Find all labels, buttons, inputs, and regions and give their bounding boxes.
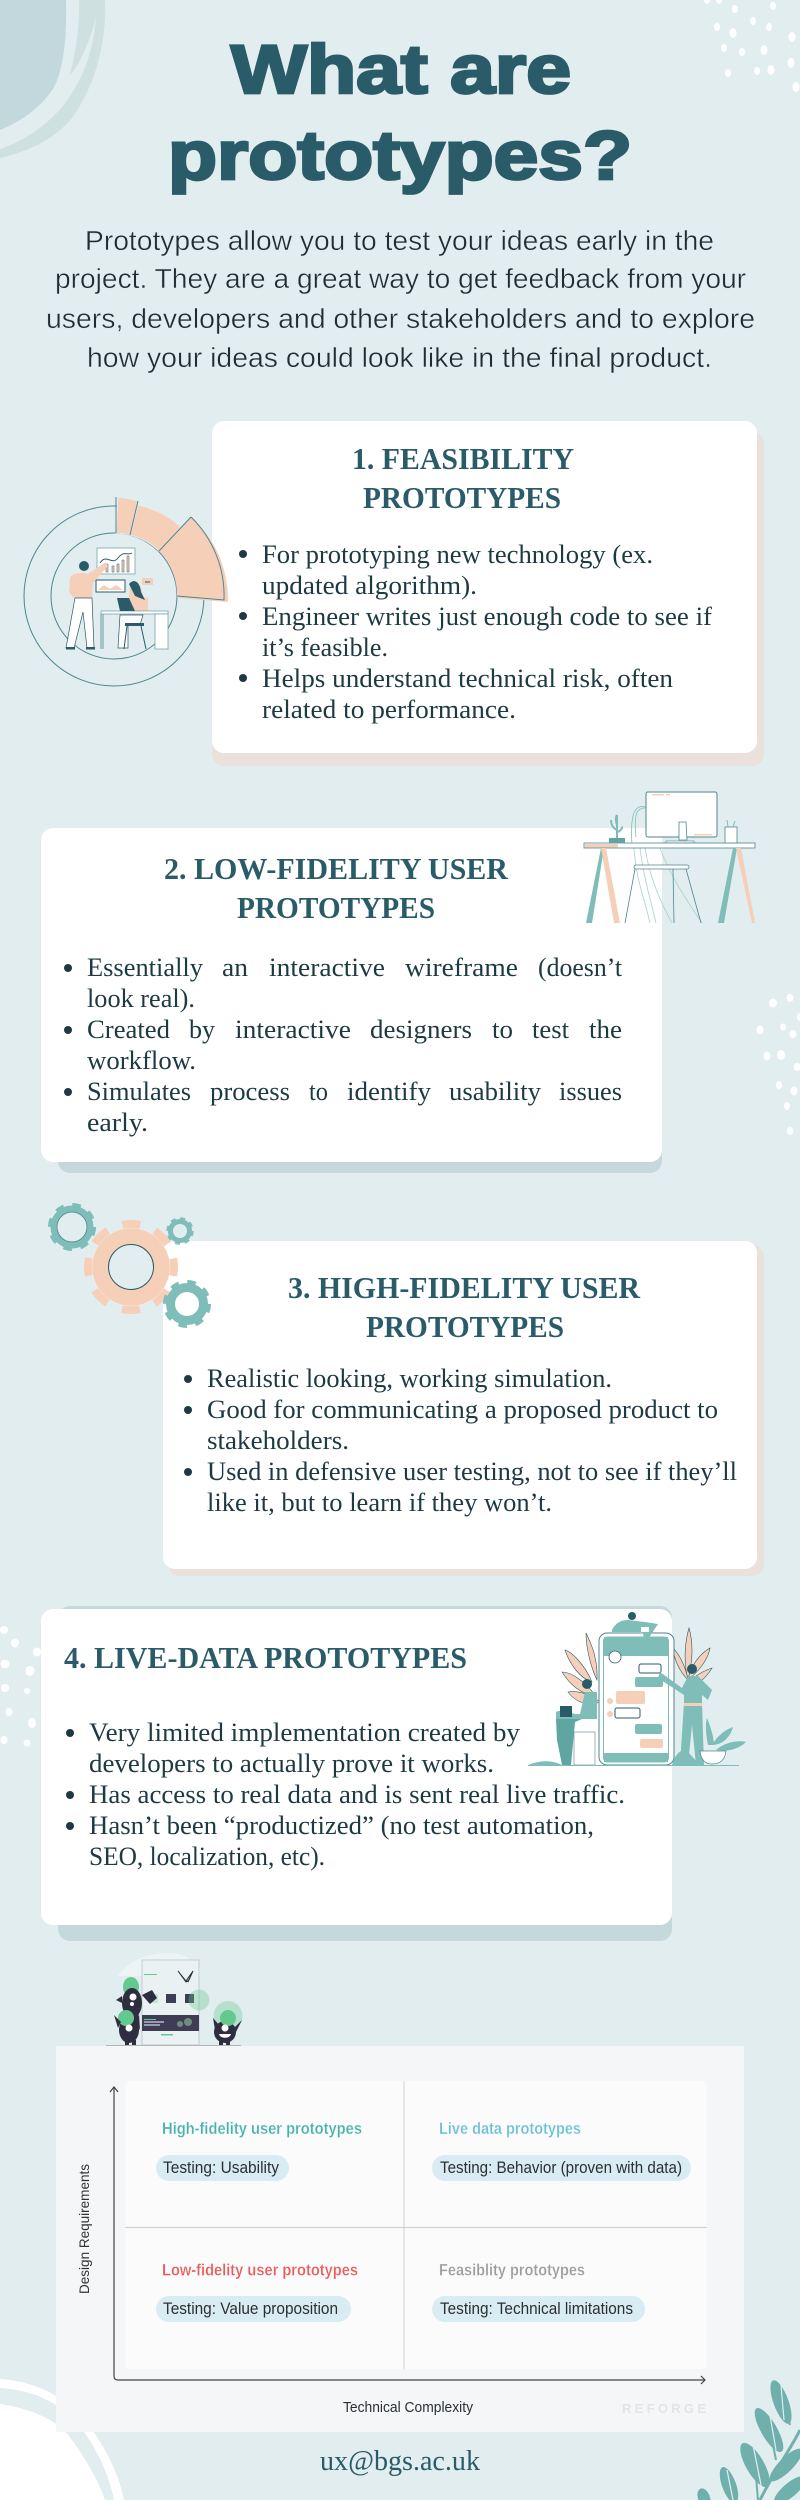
bullet list: live data: developers to actually prove it works. <box>89 1749 494 1778</box>
decorative leaf branch: bottom right <box>695 2378 800 2500</box>
phone <box>599 1633 674 1765</box>
title: prototypes? <box>168 117 632 194</box>
bullet list: live data: Very limited implementation created by <box>89 1718 520 1747</box>
bullet list: low fidelity: designers <box>370 1015 472 1044</box>
intro text: project. They are a great way to get feedback from your <box>55 263 746 294</box>
decorative blob: top left <box>0 0 105 158</box>
bullet list: low fidelity: wireframe <box>405 953 518 982</box>
heading: high fidelity: 3. HIGH-FIDELITY USER <box>288 1270 641 1305</box>
person seated <box>582 1679 592 1689</box>
decorative dots: top right <box>704 0 800 92</box>
bullet list: low fidelity: identify <box>347 1077 431 1106</box>
heading: live data: 4. LIVE-DATA PROTOTYPES <box>64 1640 467 1675</box>
quadrant: live data <box>432 2120 691 2181</box>
heading: high fidelity <box>288 1270 641 1344</box>
decorative blob: bottom left <box>0 2379 124 2500</box>
intro text: users, developers and other stakeholders and to explore <box>46 303 755 334</box>
title: What are <box>231 31 571 108</box>
bullet list: low fidelity: to <box>492 1015 513 1044</box>
panel: 2 low-fidelity user prototypes <box>41 828 662 1173</box>
quadrant: live data: Testing: Behavior (proven with data) <box>440 2159 682 2177</box>
illustration: people with giant phone <box>528 1612 746 1766</box>
footer contact: ux@bgs.ac.uk <box>320 2446 480 2477</box>
panel: 4 live-data prototypes <box>41 1606 672 1941</box>
bullet list: low fidelity: (doesn’t <box>538 953 623 982</box>
bullet list: low fidelity: the <box>589 1015 622 1044</box>
bullet list: high fidelity: Realistic looking, working simulation. <box>207 1364 612 1393</box>
panel: 3 high-fidelity user prototypes <box>163 1241 764 1576</box>
quadrant: low-fidelity: Low-fidelity user prototypes <box>162 2262 358 2280</box>
bullet list: low fidelity <box>64 953 623 1137</box>
quadrant: feasibility: Testing: Technical limitations <box>440 2300 633 2318</box>
quadrant: feasibility <box>432 2262 645 2322</box>
panel: 1 feasibility prototypes <box>212 421 764 766</box>
panel: 2x2 chart <box>56 2046 744 2432</box>
bullet list: low fidelity: workflow. <box>87 1046 196 1075</box>
bullet list: live data: Hasn’t been “productized” (no test automation, <box>89 1811 594 1840</box>
bullet list: feasibility: related to performance. <box>262 695 516 724</box>
axes arrows <box>110 2087 705 2384</box>
intro text <box>46 225 755 373</box>
bullet list: feasibility: it’s feasible. <box>262 633 388 662</box>
axis label: technical complexity: Technical Complexity <box>343 2399 473 2416</box>
quadrant: feasibility: Feasiblity prototypes <box>439 2262 585 2280</box>
bullet list: low fidelity: to <box>309 1077 328 1106</box>
bullet list: feasibility <box>239 540 712 724</box>
bullet list: high fidelity: Good for communicating a proposed product to <box>207 1395 718 1424</box>
quadrant: high-fidelity: Testing: Usability <box>163 2159 280 2177</box>
bullet list: live data: SEO, localization, etc). <box>89 1842 325 1871</box>
person on top <box>612 1620 658 1650</box>
heading: low fidelity <box>164 851 509 925</box>
axis label: design requirements: Design Requirements <box>76 2164 92 2294</box>
quadrant: low-fidelity: Testing: Value proposition <box>163 2300 338 2318</box>
bullet list: low fidelity: interactive <box>235 1015 351 1044</box>
bullet list: low fidelity: issues <box>559 1077 622 1106</box>
quadrant: high-fidelity: High-fidelity user prototypes <box>162 2120 362 2138</box>
illustration: team reviewing charts in a ring <box>24 497 228 686</box>
bullet list: low fidelity: Created <box>87 1015 170 1044</box>
bullet list: feasibility: Helps understand technical risk, often <box>262 664 673 693</box>
bullet list: feasibility: For prototyping new technology (ex. <box>262 540 653 569</box>
icon: large peach gear <box>88 1224 174 1310</box>
heading: low fidelity: PROTOTYPES <box>237 890 435 925</box>
title <box>168 31 632 194</box>
bullet list: low fidelity: usability <box>449 1077 541 1106</box>
bullet list: low fidelity: interactive <box>269 953 385 982</box>
illustration: monsters building a web page <box>106 1953 242 2046</box>
bullet list: feasibility: updated algorithm). <box>262 571 477 600</box>
bullet list: high fidelity <box>184 1364 737 1517</box>
illustration: desk with monitor and chair <box>584 792 755 923</box>
bullet list: low fidelity: by <box>189 1015 215 1044</box>
decorative dots: left <box>0 1626 41 1746</box>
decorative dots: right middle <box>756 994 800 1135</box>
bullet list: low fidelity: an <box>222 953 248 982</box>
quadrant: low-fidelity <box>156 2262 358 2322</box>
bullet list: low fidelity: early. <box>87 1108 148 1137</box>
heading: high fidelity: PROTOTYPES <box>366 1309 564 1344</box>
potted plant <box>706 1718 746 1751</box>
chat bubbles <box>607 1664 663 1748</box>
bullet list: low fidelity: test <box>532 1015 570 1044</box>
bullet list: high fidelity: Used in defensive user testing, not to see if they’ll <box>207 1457 737 1486</box>
bullet list: live data: Has access to real data and is sent real live traffic. <box>89 1780 625 1809</box>
bullet list: low fidelity: Essentially <box>87 953 203 982</box>
heading: low fidelity: 2. LOW-FIDELITY USER <box>164 851 509 886</box>
bullet list: low fidelity: look real). <box>87 984 195 1013</box>
bullet list: high fidelity: like it, but to learn if they won’t. <box>207 1488 552 1517</box>
watermark: REFORGE <box>622 2401 706 2416</box>
intro text: Prototypes allow you to test your ideas early in the <box>85 225 714 256</box>
icon: teal gear top left <box>50 1205 94 1249</box>
bullet list: feasibility: Engineer writes just enough code to see if <box>262 602 712 631</box>
quadrant: live data: Live data prototypes <box>439 2120 581 2138</box>
bullet list: low fidelity: process <box>210 1077 290 1106</box>
bullet list: high fidelity: stakeholders. <box>207 1426 349 1455</box>
icon: teal gear bottom right <box>165 1282 209 1326</box>
intro text: how your ideas could look like in the final product. <box>87 342 712 373</box>
quadrant: high-fidelity <box>156 2120 362 2181</box>
leaves <box>562 1628 712 1704</box>
heading: feasibility: 1. FEASIBILITY <box>352 441 574 476</box>
heading: feasibility: PROTOTYPES <box>363 480 561 515</box>
icon: small teal gear <box>168 1218 192 1244</box>
bullet list: live data <box>66 1718 625 1871</box>
person standing <box>687 1664 697 1674</box>
bullet list: low fidelity: Simulates <box>87 1077 191 1106</box>
illustration: gears <box>50 1205 209 1326</box>
heading: feasibility <box>352 441 574 515</box>
